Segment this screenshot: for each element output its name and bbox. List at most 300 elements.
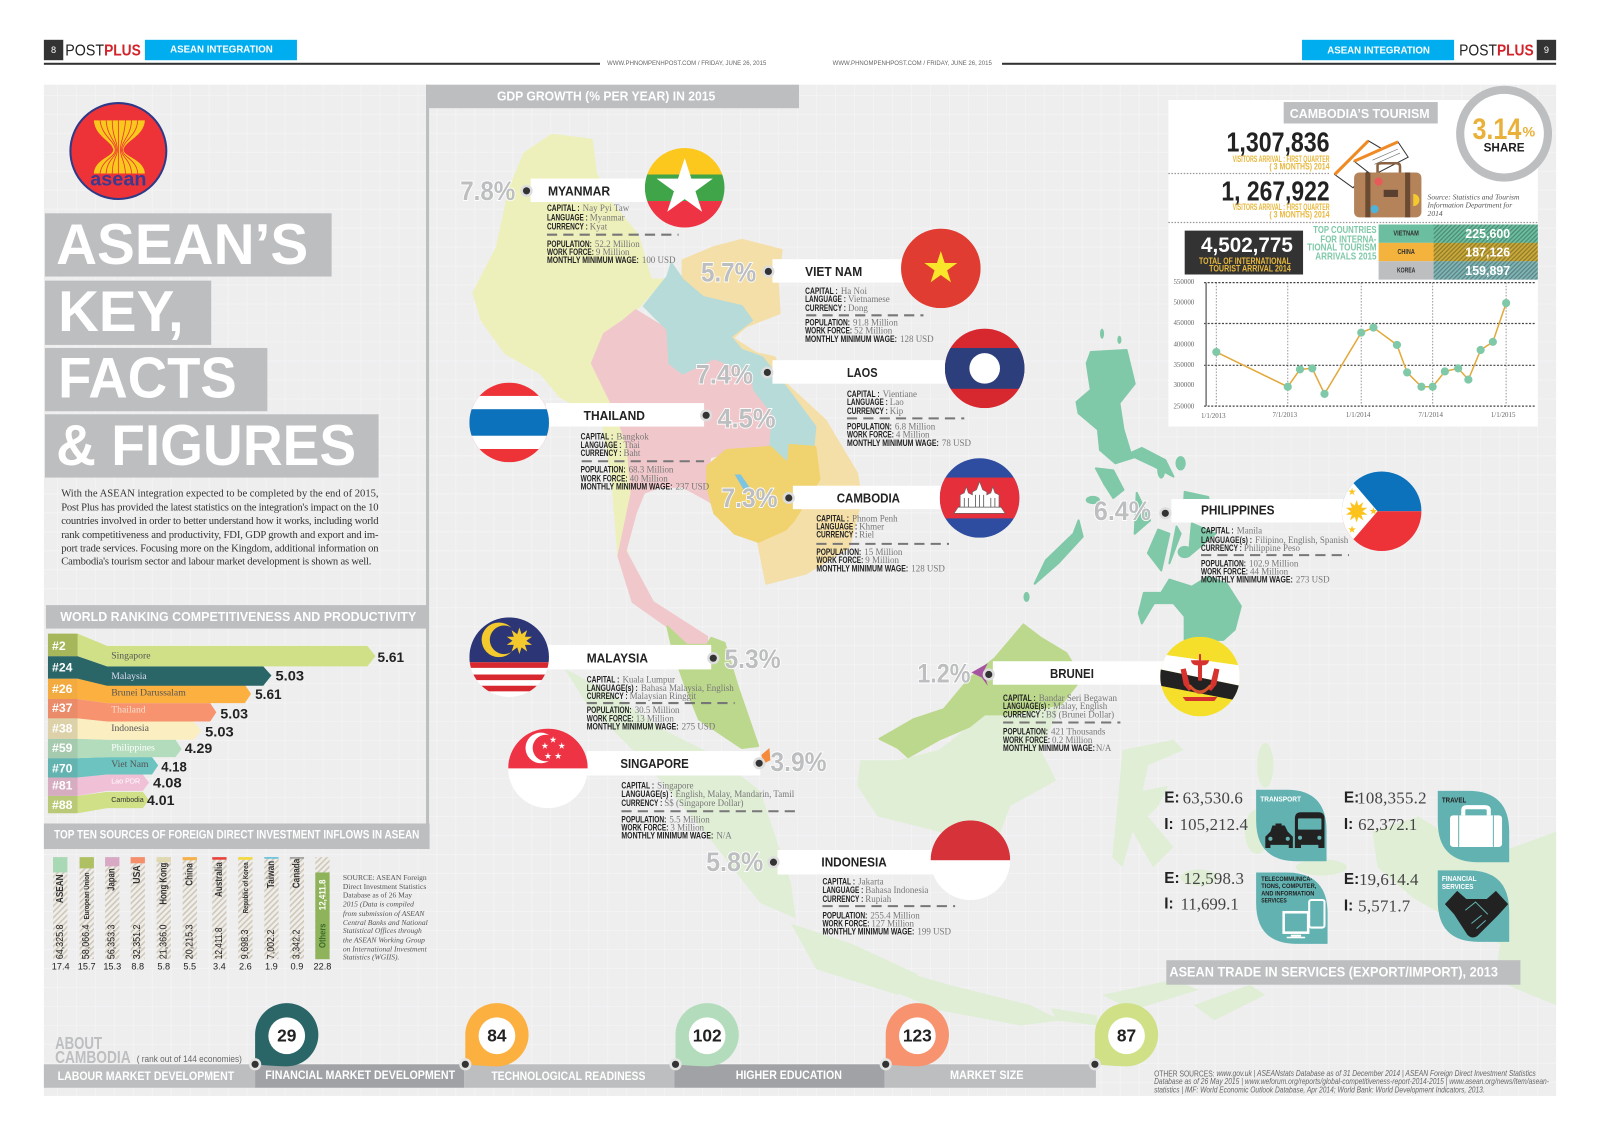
ranking bar chart [48,634,404,813]
bar: Philippines: 4.29 [185,741,212,757]
line chart: 7/1/2013 [1272,412,1298,419]
trade: travel: 108,355.2 [1357,788,1427,807]
bar: Brunei: 5.61 [255,687,282,703]
Viet Nam facts: LANGUAGE : [805,294,846,304]
bar: Philippines: #59 [52,741,73,755]
Brunei facts: CAPITAL : [1003,693,1036,703]
top countries caption: TOP COUNTRIES [1313,225,1377,236]
column: Japan: 56,353.3 [107,924,118,959]
Indonesia facts [822,877,955,937]
bar: Singapore [48,634,404,666]
Philippines GDP: 6.4% [1094,496,1151,526]
map: Cambodia [707,445,819,542]
Brunei flag [1160,637,1240,716]
Indonesia facts: CAPITAL : [822,877,855,887]
Philippines facts: CURRENCY : [1201,543,1242,553]
Philippines name: PHILIPPINES [1201,503,1275,518]
Laos strip [772,360,951,384]
Thailand facts: CURRENCY : [581,448,621,458]
Laos facts: Kip [890,406,904,416]
line chart: 350000 [1173,362,1195,369]
column: ASEAN: ASEAN [55,874,66,903]
Viet Nam facts: Dong [848,303,868,313]
bar: Viet Nam: #70 [52,761,73,775]
bar: Viet Nam: 4.18 [161,759,187,775]
bar: Cambodia [48,792,175,813]
Singapore name: SINGAPORE [620,756,689,771]
intro paragraph: Post Plus has provided the latest statistics on the integration's impact on the 10 [61,503,379,514]
Malaysia facts: CURRENCY : [587,691,628,701]
Cambodia name: CAMBODIA [837,490,900,505]
trade: telecommunications: I: [1164,896,1174,913]
pin: 84: 84 [487,1026,507,1046]
Cambodia facts: POPULATION: [816,547,861,557]
Indonesia flag [931,820,1010,900]
bar: Malaysia [48,656,304,686]
right masthead [833,40,1556,67]
bar: Thailand: 5.03 [220,706,248,722]
trade: financial services: E: [1344,871,1359,888]
Thailand facts: LANGUAGE : [581,440,621,450]
Singapore facts: LANGUAGE(s) : [621,789,673,799]
left masthead: 8 [51,45,56,55]
Viet Nam facts: CURRENCY : [805,303,846,313]
Cambodia ranking bar: HIGHER EDUCATION [736,1069,842,1082]
share ring [1460,90,1548,178]
FDI source note: Direct Investment Statistics [343,882,426,891]
column: China: China [184,863,195,886]
FDI heading: TOP TEN SOURCES OF FOREIGN DIRECT INVESTMENT INFLOWS IN ASEAN [54,828,420,842]
tourism source: Information Department for [1427,201,1512,210]
Brunei facts: POPULATION: [1003,727,1048,737]
Laos GDP: 7.4% [696,360,753,390]
other sources [1154,1069,1549,1094]
intro paragraph: rank competitiveness and productivity, FDI, GDP growth and export and im- [61,530,379,541]
Malaysia facts: LANGUAGE(s) : [587,683,638,693]
Philippines callout [1094,471,1421,585]
column: Australia [212,857,227,971]
FDI source note: from submission of ASEAN [343,909,425,918]
Philippines facts [1201,526,1349,585]
column: European Union: European Union [82,872,91,919]
trade: transport [1164,788,1327,861]
arrivals figure 1: ( 3 MONTHS) 2014 [1269,161,1330,171]
Viet Nam facts: MONTHLY MINIMUM WAGE: [805,334,897,344]
Viet Nam facts: Vietnamese [848,294,890,304]
Singapore facts: Singapore [657,781,694,791]
bar: Cambodia: Cambodia [111,796,144,804]
share ring: % [1522,125,1535,141]
column: European Union [78,857,96,971]
pin: 123: 123 [903,1026,932,1046]
icon: telecom tile: AND INFORMATION [1261,890,1315,897]
Thailand facts: POPULATION: [581,464,626,474]
column: Republic of Korea: Republic of Korea [241,862,250,913]
Thailand strip [546,403,704,427]
Indonesia facts: 255.4 Million [870,910,920,920]
column: ASEAN: 17.4 [52,961,70,971]
Brunei strip [993,661,1168,685]
column: Republic of Korea: 9,698.3 [240,930,251,959]
column: ASEAN [52,857,70,971]
title [45,213,379,478]
Laos name: LAOS [847,365,878,380]
top countries table: VIETNAM [1393,230,1419,238]
column: European Union: 58,066.4 [81,924,92,959]
Philippines strip [1171,499,1357,522]
column: Hong Kong: Hong Kong [158,863,169,905]
map of South-East Asia [473,135,1556,1026]
icon: finance tile: SERVICES [1442,882,1473,891]
right masthead: ASEAN INTEGRATION [1327,46,1430,57]
Thailand facts: Bangkok [616,432,649,442]
right masthead: PLUS [1497,43,1534,60]
line chart: 300000 [1173,382,1195,389]
Philippines facts: Philippine Peso [1244,543,1300,553]
Cambodia facts: LANGUAGE : [816,522,857,532]
Indonesia facts: Bahasa Indonesia [865,885,928,895]
Myanmar facts: WORK FORCE: [547,247,594,257]
intro paragraph: With the ASEAN integration expected to be completed by the end of 2015, [61,488,379,499]
Laos flag [945,329,1024,408]
line chart [1173,279,1536,420]
FDI source note: SOURCE: ASEAN Foreign [343,873,427,882]
Thailand facts: 40 Million [630,474,668,484]
Cambodia facts [816,513,949,573]
FDI source note: on International Investment [343,944,428,953]
Malaysia facts: POPULATION: [587,705,632,715]
trade: transport: I: [1164,816,1174,833]
bar: Thailand: Thailand [111,705,146,716]
Viet Nam name: VIET NAM [805,264,862,279]
FDI column chart [52,857,331,971]
Viet Nam facts: 52 Million [854,326,893,336]
Philippines flag [1342,471,1421,551]
top countries caption [1307,225,1377,263]
arrivals figure 2 [1221,175,1330,219]
Viet Nam facts: Ha Noi [841,286,867,296]
line chart: 1/1/2013 [1201,413,1226,420]
trade: travel: 62,372.1 [1358,815,1417,834]
Philippines facts: CAPITAL : [1201,526,1234,536]
column: Hong Kong: 5.8 [157,961,170,971]
Cambodia callout [721,458,1019,573]
Indonesia GDP: 5.8% [706,847,763,877]
Singapore facts: English, Malay, Mandarin, Tamil [676,789,795,799]
map: Brunei marker [971,663,988,686]
bar: Indonesia: #38 [52,722,73,736]
icon: suitcase and tickets [1335,141,1421,217]
Myanmar facts: CAPITAL : [547,203,580,213]
line chart: 1/1/2015 [1491,412,1516,419]
right masthead: POST [1459,43,1497,60]
icon: travel tile: TRAVEL [1442,796,1467,805]
top countries table: 225,600 [1465,226,1510,241]
column: China: 5.5 [183,961,196,971]
Myanmar facts [547,203,679,265]
about Cambodia label: CAMBODIA [55,1047,131,1067]
bar: Singapore: #2 [52,639,66,653]
tourism source [1427,192,1520,218]
Cambodia ranking bar: MARKET SIZE [950,1069,1024,1082]
Malaysia facts: Bahasa Malaysia, English [641,683,734,693]
Singapore facts: MONTHLY MINIMUM WAGE: [621,831,713,841]
Viet Nam callout [701,229,981,344]
tourism source: Source: Statistics and Tourism [1428,192,1520,201]
left masthead: ASEAN INTEGRATION [170,45,273,56]
Thailand GDP: 4.5% [717,403,776,433]
intro paragraph: countries involved in order to better understand how it works, including world [61,516,379,527]
pin: 87: 87 [1117,1026,1136,1046]
Viet Nam strip [772,259,910,283]
trade: travel: E: [1344,789,1359,806]
Myanmar facts: 9 Million [596,247,630,257]
other sources: OTHER SOURCES: www.gov.uk | ASEANstats Database as of 31 December 2014 | ASEAN Foreign Direct Investment Statistics [1154,1069,1536,1078]
Cambodia facts: Phnom Penh [852,513,898,523]
Cambodia ranking bar [44,1064,1096,1088]
arrivals figure 1 [1227,126,1330,171]
Philippines facts: 102.9 Million [1249,558,1299,568]
Singapore facts: N/A [716,831,732,841]
Philippines facts: Filipino, English, Spanish [1255,535,1349,545]
intro paragraph [61,488,379,568]
bar: Viet Nam [48,757,187,778]
Laos facts: 78 USD [942,438,972,448]
column: Japan: 15.3 [103,961,121,971]
column: Canada: Canada [291,858,302,888]
bar: Brunei: Brunei Darussalam [111,687,186,698]
Myanmar facts: LANGUAGE : [547,212,588,222]
world ranking heading [46,605,427,629]
column: Others [314,857,331,971]
Thailand facts [581,432,710,492]
Myanmar name: MYANMAR [548,183,611,198]
Malaysia name: MALAYSIA [587,651,648,666]
Viet Nam GDP: 5.7% [701,257,756,287]
Laos facts: Vientiane [883,389,917,399]
trade: financial services: I: [1344,898,1353,915]
Viet Nam facts: WORK FORCE: [805,326,852,336]
Philippines facts: Manila [1237,526,1262,536]
Indonesia facts: 127 Million [871,918,915,928]
Singapore facts: 3 Million [670,823,705,833]
arrivals figure 2: ( 3 MONTHS) 2014 [1269,209,1330,219]
total arrivals box: TOURIST ARRIVAL 2014 [1209,263,1292,273]
Cambodia facts: WORK FORCE: [816,555,863,565]
bar: Philippines: Philippines [111,742,155,753]
line chart: 550000 [1173,279,1195,286]
Viet Nam facts: 128 USD [900,334,934,344]
total arrivals box: TOTAL OF INTERNATIONAL [1199,256,1291,266]
Indonesia callout [706,820,1010,937]
Philippines facts: 44 Million [1250,566,1289,576]
column: USA: USA [132,865,143,884]
Brunei facts: 0.2 Million [1052,735,1093,745]
Malaysia GDP: 5.3% [724,644,781,674]
Indonesia facts: 199 USD [917,927,952,937]
Indonesia facts: WORK FORCE: [822,918,869,928]
Malaysia facts: CAPITAL : [587,675,619,685]
column: Japan [103,857,121,971]
Cambodia strip [793,486,941,509]
Indonesia strip [778,850,936,874]
top countries table: CHINA [1397,248,1415,256]
Indonesia facts: Jakarta [858,877,884,887]
Brunei facts: B$ (Brunei Dollar) [1046,709,1114,719]
Malaysia facts: Kuala Lumpur [622,675,675,685]
map: Singapore marker [761,748,770,763]
icon: transport tile: TRANSPORT [1260,794,1301,803]
bar: Brunei: #26 [52,682,73,696]
bar: Brunei [48,679,282,703]
right masthead: WWW.PHNOMPENHPOST.COM / FRIDAY, JUNE 26, 2015 [833,60,992,67]
bar: Malaysia: 5.03 [276,669,304,685]
column: USA: 8.8 [131,961,144,971]
Thailand name: THAILAND [584,408,645,423]
bar: Lao PDR: 4.08 [153,776,182,792]
Singapore facts: S$ (Singapore Dollar) [664,798,744,808]
Thailand callout [469,383,776,492]
trade: transport: E: [1164,789,1180,806]
Indonesia facts: Rupiah [865,894,892,904]
bar: Cambodia: 4.01 [147,793,175,809]
arrivals figure 1: 1,307,836 [1227,126,1330,157]
total arrivals box: 4,502,775 [1201,233,1293,257]
tourism heading [1284,102,1438,123]
Brunei GDP: 1.2% [917,658,970,688]
bar: Thailand: #37 [52,701,73,715]
Myanmar facts: CURRENCY : [547,222,588,232]
column: Taiwan: Taiwan [266,861,277,888]
bar: Viet Nam: Viet Nam [111,759,149,770]
Viet Nam flag [901,229,981,308]
bar: Singapore: 5.61 [378,650,404,666]
icon: finance tile: FINANCIAL [1442,874,1477,883]
title: ASEAN’S [56,213,308,277]
Malaysia facts [587,675,735,732]
intro paragraph: port trade services. Focusing more on the Kingdom, additional information on [61,543,379,554]
Thailand facts: MONTHLY MINIMUM WAGE: [581,482,673,492]
pin: 84 [459,1003,529,1070]
left masthead: POST [65,43,104,60]
Cambodia ranking bar: TECHNOLOGICAL READINESS [491,1070,646,1083]
Indonesia facts: LANGUAGE : [822,885,863,895]
Malaysia facts: 13 Million [636,713,674,723]
Viet Nam facts: CAPITAL : [805,286,838,296]
pin: 123 [880,1003,949,1070]
FDI source note: the ASEAN Working Group [343,935,425,944]
column: Australia: Australia [214,862,225,897]
bar: Cambodia: #88 [52,798,73,812]
column: China [183,857,197,971]
Singapore facts: CAPITAL : [621,781,654,791]
Cambodia facts: 15 Million [864,547,903,557]
Laos facts: Lao [890,397,904,407]
Cambodia ranking bar: LABOUR MARKET DEVELOPMENT [58,1070,235,1083]
trade: telecommunications: E: [1164,870,1180,887]
Cambodia facts: 9 Million [865,555,899,565]
Myanmar callout [460,148,724,265]
about Cambodia label: ABOUT [55,1033,102,1053]
icon: finance tile [1438,870,1509,942]
GDP heading [427,85,799,108]
ASEAN logo: asean [90,169,146,191]
column: Republic of Korea: 2.6 [239,961,252,971]
Singapore flag [508,729,588,808]
other sources: statistics | IMF: World Economic Outlook Database, Apr 2014; World Bank: World Development Indicators, 2013. [1154,1085,1485,1094]
trade: financial services: 19,614.4 [1359,870,1419,889]
icon: telecom tile: TELECOMMUNICA- [1261,876,1312,883]
Brunei name: BRUNEI [1050,666,1094,681]
Cambodia facts: CURRENCY : [816,530,857,540]
Laos facts: 4 Million [896,430,930,440]
icon: telecom tile [1256,872,1328,944]
column: Canada: 0.9 [291,961,303,971]
bar: Malaysia: Malaysia [111,671,147,682]
line chart: 450000 [1173,320,1195,327]
Thailand facts: WORK FORCE: [581,474,628,484]
trade: financial services [1344,870,1509,942]
Viet Nam facts [805,286,934,344]
Brunei facts: CURRENCY : [1003,709,1044,719]
icon: telecom tile: TIONS, COMPUTER, [1261,883,1317,890]
trade: telecommunications: 11,699.1 [1181,895,1239,914]
GDP heading: GDP GROWTH (% PER YEAR) IN 2015 [497,88,715,103]
Cambodia facts: 128 USD [911,563,945,573]
share ring: SHARE [1484,141,1525,154]
Thailand facts: Baht [623,448,641,458]
tourism source: 2014 [1428,209,1443,218]
Cambodia ranking bar: FINANCIAL MARKET DEVELOPMENT [265,1069,456,1082]
column: Others: 22.8 [314,961,331,971]
Laos facts: LANGUAGE : [847,397,888,407]
FDI source note: Database as of 26 May [343,890,412,899]
Myanmar facts: 100 USD [642,255,676,265]
Cambodia GDP: 7.3% [721,483,778,513]
Cambodia facts: MONTHLY MINIMUM WAGE: [816,563,908,573]
map: Thailand [592,310,772,645]
trade heading [1166,960,1520,985]
bar: Philippines [48,739,212,758]
FDI heading [44,823,430,849]
Myanmar flag [645,148,724,228]
Myanmar facts: Myanmar [590,212,625,222]
top countries caption: FOR INTERNA- [1320,234,1377,245]
about Cambodia label [55,1033,242,1067]
column: USA [131,857,145,971]
Laos callout [696,329,1024,448]
arrivals figure 2: 1, 267,922 [1221,175,1330,206]
left masthead: WWW.PHNOMPENHPOST.COM / FRIDAY, JUNE 26, 2015 [607,60,767,67]
pin: 102 [669,1003,739,1070]
pin: 102: 102 [693,1026,722,1046]
column: Taiwan [264,857,279,971]
Thailand facts: 68.3 Million [629,464,674,474]
icon: telecom tile: SERVICES [1261,898,1287,905]
Laos facts: CURRENCY : [847,406,888,416]
Myanmar facts: Kyat [590,222,608,232]
line chart: 1/1/2014 [1346,412,1371,419]
Indonesia name: INDONESIA [821,855,887,870]
Singapore facts [621,781,796,841]
bar: Singapore: Singapore [111,651,151,662]
Brunei facts: LANGUAGE(s) : [1003,701,1050,711]
Cambodia flag [940,458,1019,538]
top countries caption: TIONAL TOURISM [1307,242,1377,253]
bar: Indonesia: Indonesia [111,723,150,734]
title: & FIGURES [56,414,356,478]
column: Japan: Japan [107,868,118,891]
